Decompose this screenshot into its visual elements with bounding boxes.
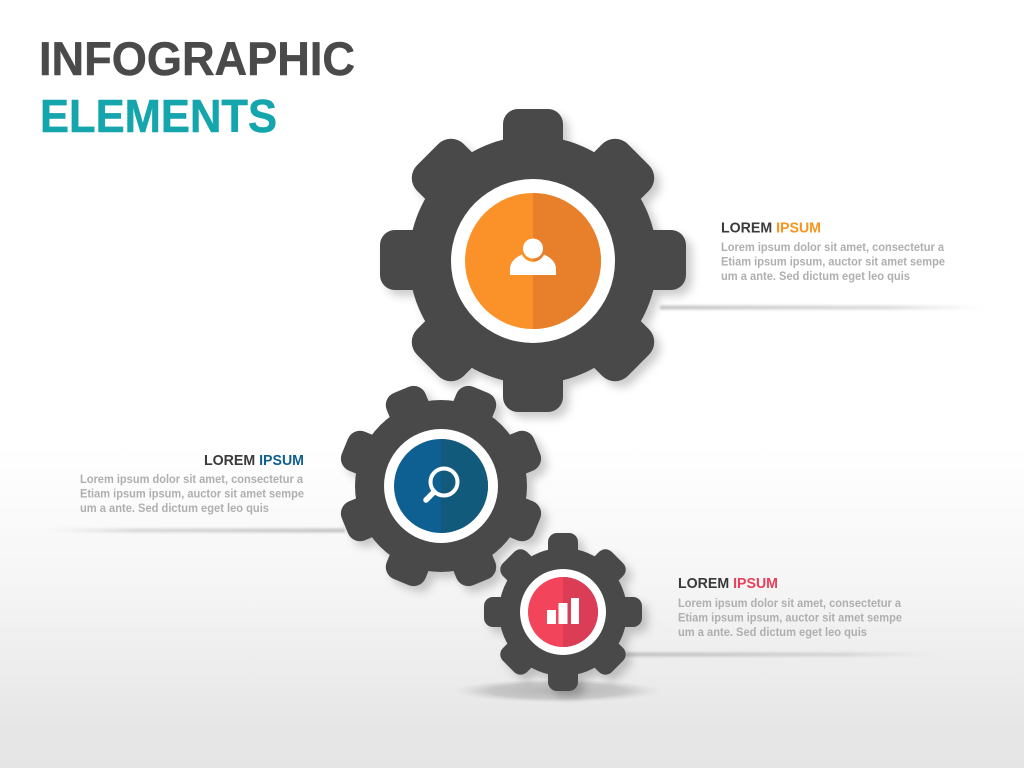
gear body <box>380 109 686 412</box>
text block: bottom right: LOREM IPSUM <box>678 575 778 592</box>
icon: person <box>510 238 556 275</box>
icon: magnifier <box>426 468 458 500</box>
text block: bottom right: Etiam ipsum ipsum, auctor sit amet sempe <box>678 612 902 624</box>
text block: left: Lorem ipsum dolor sit amet, consectetur a <box>80 474 304 486</box>
gear: medium blue <box>337 382 545 590</box>
gear: large orange <box>380 109 686 412</box>
text block: top right: um a ante. Sed dictum eget leo quis <box>721 271 910 283</box>
text block: left: LOREM IPSUM <box>204 452 304 469</box>
gear: small red <box>484 533 642 691</box>
text block: left: Etiam ipsum ipsum, auctor sit amet sempe <box>80 488 304 500</box>
shadow line: top right <box>660 306 985 310</box>
title: ELEMENTS <box>40 90 277 142</box>
text block: bottom right: um a ante. Sed dictum eget leo quis <box>678 627 867 639</box>
gear body <box>484 533 642 691</box>
text block: left: um a ante. Sed dictum eget leo quis <box>80 503 269 515</box>
text block: bottom right: Lorem ipsum dolor sit amet, consectetur a <box>678 598 902 610</box>
icon: bar chart <box>547 598 579 624</box>
text block: bottom right <box>678 575 902 639</box>
shadow line: left <box>45 528 345 532</box>
title: INFOGRAPHIC <box>39 32 355 85</box>
text block: top right <box>721 220 945 283</box>
ground shadow under small gear <box>452 680 662 704</box>
shadow line: bottom right <box>625 652 937 656</box>
text block: top right: Lorem ipsum dolor sit amet, consectetur a <box>721 242 945 254</box>
text block: top right: Etiam ipsum ipsum, auctor sit amet sempe <box>721 256 945 268</box>
text block: left <box>80 452 304 515</box>
text block: top right: LOREM IPSUM <box>721 220 821 236</box>
gear body <box>337 382 545 590</box>
title <box>39 32 355 142</box>
